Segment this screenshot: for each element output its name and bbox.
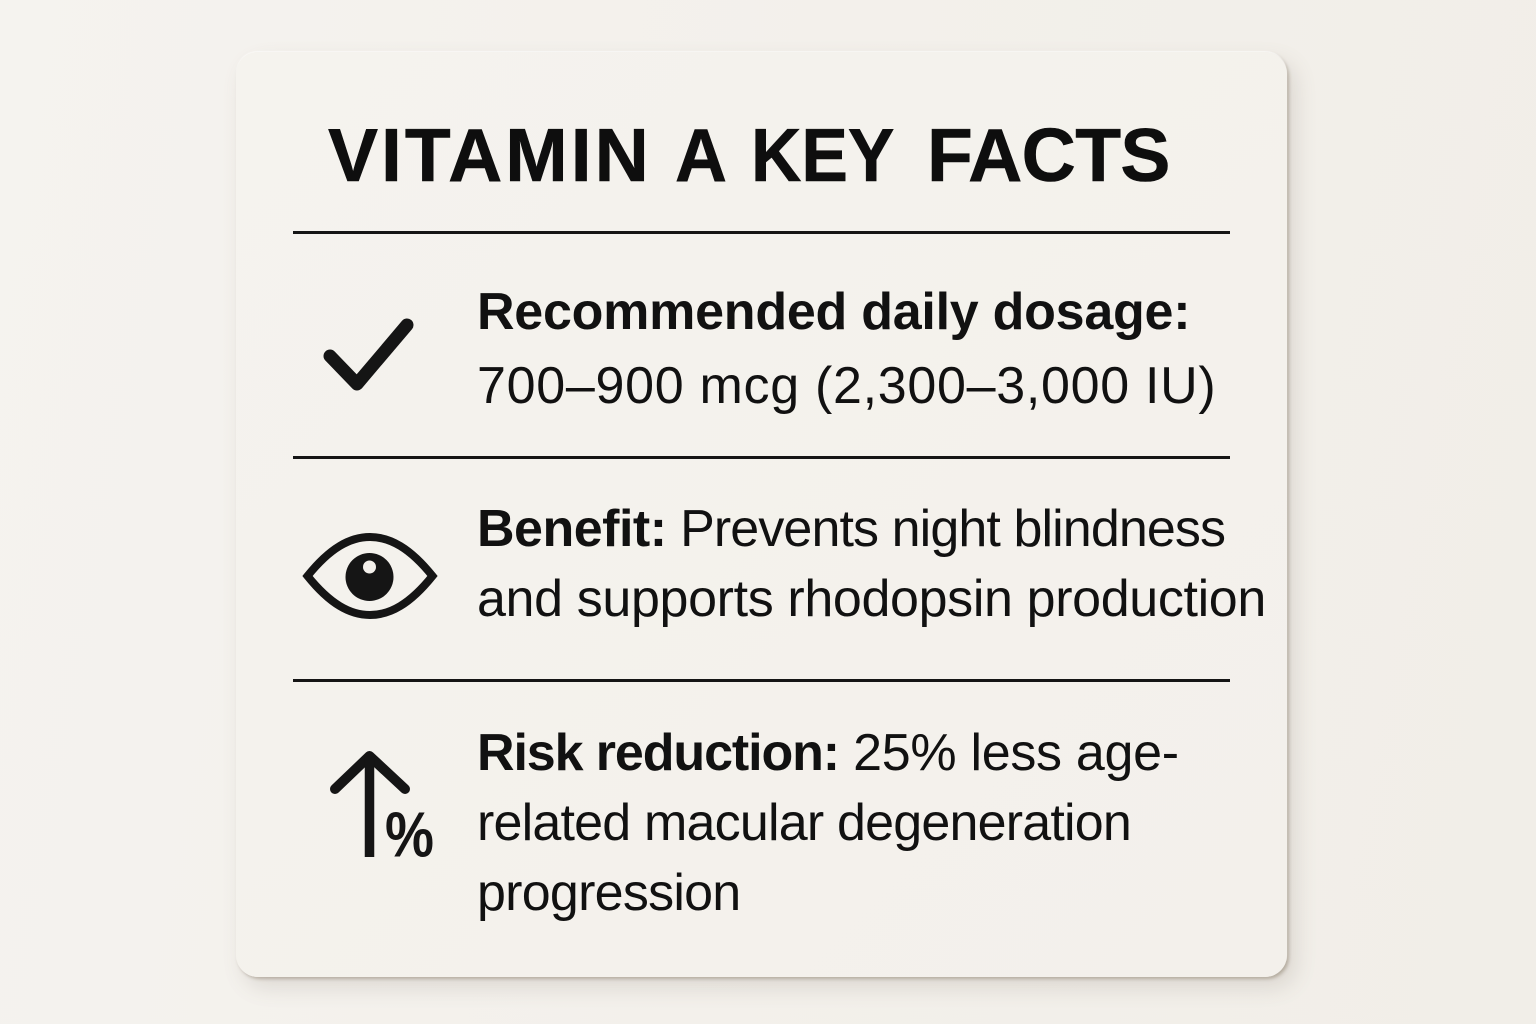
text: benefit xyxy=(477,500,1266,628)
text: risk reduction: Risk reduction: 25% less age- xyxy=(477,724,1179,782)
text: risk reduction: progression xyxy=(477,864,740,922)
text: benefit: Benefit: Prevents night blindness xyxy=(477,500,1225,558)
icon: eye xyxy=(302,533,438,619)
panel: key facts card xyxy=(236,52,1287,977)
text: recommended daily dosage: Recommended daily dosage: xyxy=(477,283,1190,341)
text: benefit: and supports rhodopsin production xyxy=(477,570,1266,628)
text: recommended daily dosage xyxy=(477,283,1216,415)
title: VITAMIN xyxy=(328,113,652,197)
icon: arrow up with percent: % xyxy=(385,799,434,870)
icon: check mark xyxy=(324,318,414,390)
title: FACTS xyxy=(927,113,1170,197)
text: risk reduction xyxy=(477,724,1179,922)
title: KEY xyxy=(751,113,894,197)
text: risk reduction: related macular degeneration xyxy=(477,794,1131,852)
title xyxy=(328,113,1170,197)
text: recommended daily dosage: 700–900 mcg (2,300–3,000 IU) xyxy=(477,357,1216,415)
title: A xyxy=(675,113,727,197)
icon: arrow up with percent xyxy=(330,751,434,870)
